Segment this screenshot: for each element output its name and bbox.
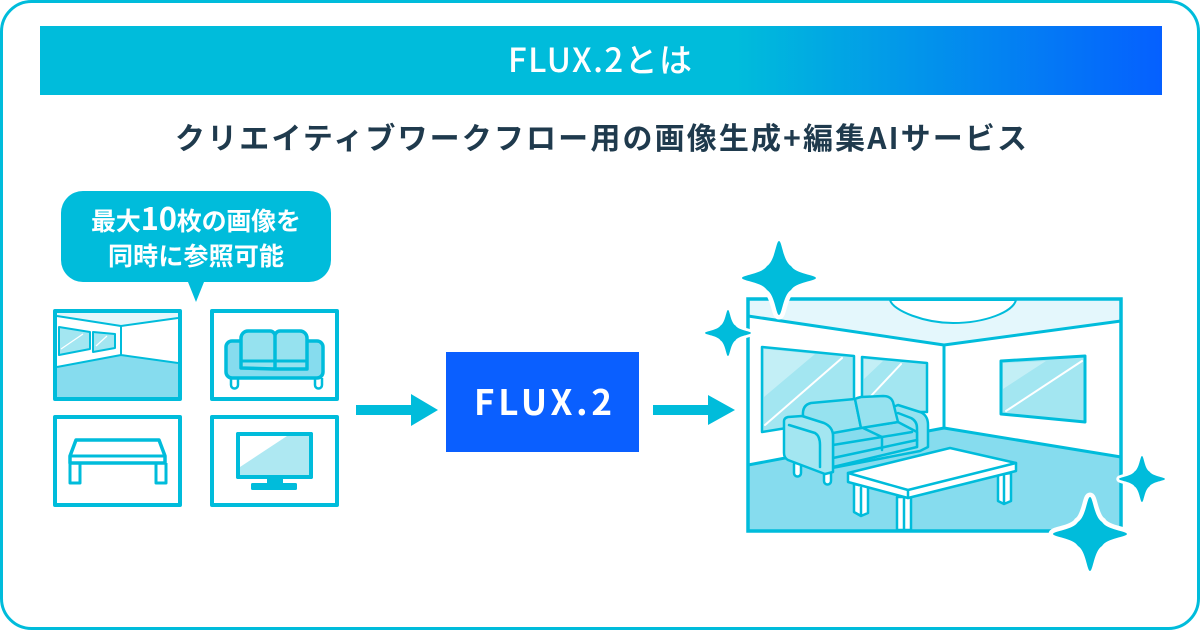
output image: generated living room [748, 299, 1121, 531]
callout: up to 10 reference images: 同時に参照可能 [108, 237, 284, 273]
icon: sparkle right small [1119, 456, 1165, 502]
sofa [784, 396, 928, 484]
input image: table [55, 417, 180, 505]
input image: empty room [55, 311, 180, 399]
callout: up to 10 reference images [61, 191, 331, 302]
FLUX.2 model box [446, 352, 639, 452]
FLUX.2 model box: FLUX.2 [474, 375, 612, 426]
icon: sparkle bottom large [1053, 497, 1127, 571]
windows [762, 347, 1085, 432]
subtitle: クリエイティブワークフロー用の画像生成+編集AIサービス [175, 114, 1027, 158]
callout: up to 10 reference images: 最大10枚の画像を [91, 194, 301, 239]
header band [40, 26, 1162, 95]
input image: sofa [212, 311, 337, 399]
coffee table [848, 448, 1016, 530]
arrow: inputs to FLUX.2 [356, 394, 438, 426]
icon: sparkle top small [705, 310, 751, 356]
input image: TV [212, 417, 337, 505]
arrow: FLUX.2 to output [653, 395, 735, 425]
icon: sparkle top large [742, 241, 816, 315]
title: FLUX.2とは [508, 34, 692, 82]
